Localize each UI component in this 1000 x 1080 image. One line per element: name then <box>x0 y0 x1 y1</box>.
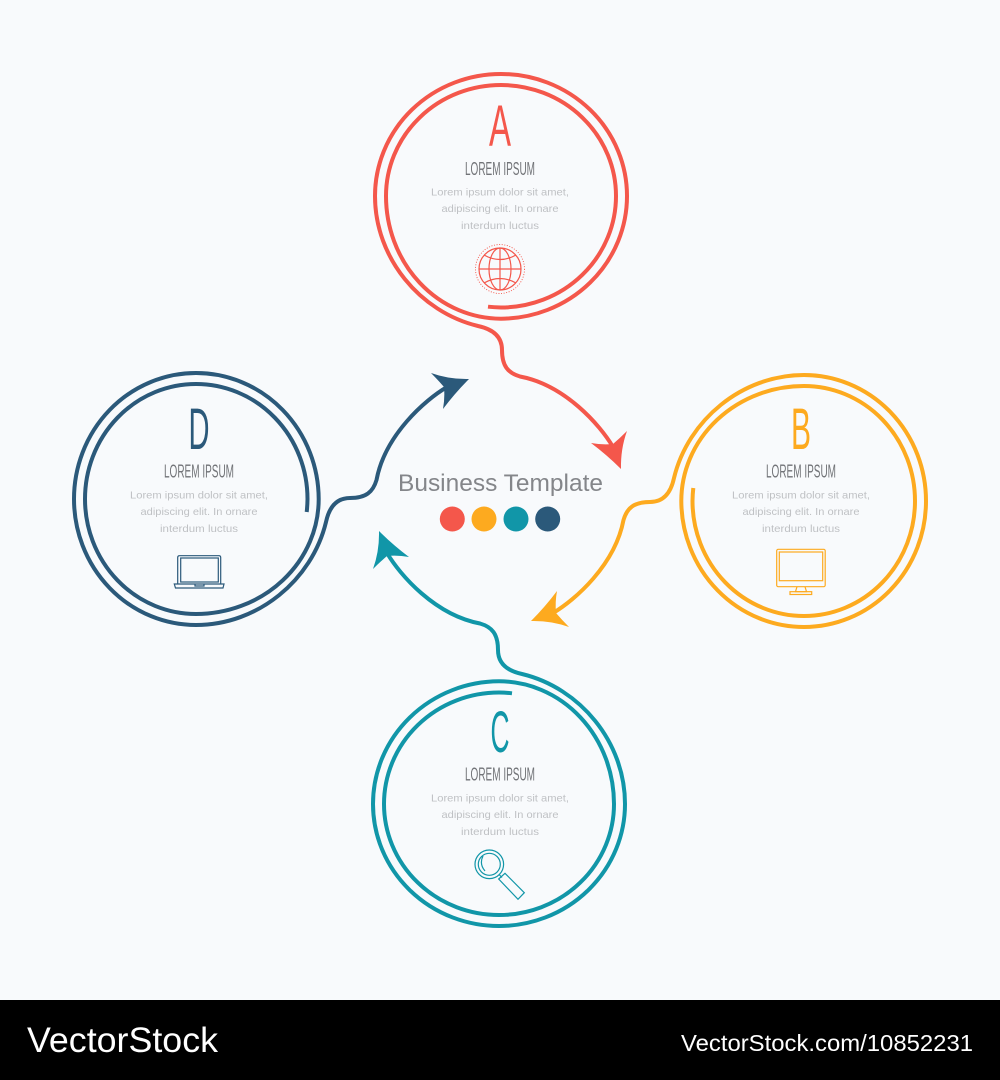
text block A: adipiscing elit. In ornare <box>442 203 559 215</box>
letter D: D <box>188 397 210 462</box>
heading A: LOREM IPSUM <box>465 159 535 179</box>
heading C: LOREM IPSUM <box>465 764 535 784</box>
text block A: interdum luctus <box>461 220 539 232</box>
spiral arrow D <box>74 373 469 625</box>
panel: C <box>373 531 625 926</box>
text block A: Lorem ipsum dolor sit amet, <box>431 186 569 198</box>
icon: monitor <box>777 549 825 594</box>
text block A <box>431 186 569 232</box>
icon: magnifier <box>475 850 524 899</box>
icon: laptop <box>174 556 224 588</box>
color dots <box>440 506 560 532</box>
center title: Business Template <box>398 470 603 497</box>
footer url: VectorStock.com/10852231 <box>681 1030 973 1056</box>
footer logo: VectorStock <box>27 1021 219 1060</box>
heading B: LOREM IPSUM <box>766 462 836 482</box>
panel: D <box>74 373 469 625</box>
icon: globe <box>476 244 524 294</box>
text block D: adipiscing elit. In ornare <box>140 506 258 518</box>
spiral arrow A <box>375 74 627 469</box>
text block C: adipiscing elit. In ornare <box>442 809 559 821</box>
text block D <box>130 490 268 535</box>
text block C: Lorem ipsum dolor sit amet, <box>431 792 569 804</box>
text block B: interdum luctus <box>762 523 840 535</box>
text block D: interdum luctus <box>160 523 238 535</box>
text block C <box>431 792 569 838</box>
text block C: interdum luctus <box>461 826 539 838</box>
spiral arrow B <box>531 375 926 627</box>
letter A: A <box>489 94 511 159</box>
panel: A <box>375 74 627 469</box>
text block B: adipiscing elit. In ornare <box>742 506 860 518</box>
spiral arrow C <box>373 531 625 926</box>
footer bar <box>0 1000 1000 1080</box>
letter B: B <box>791 397 811 462</box>
text block D: Lorem ipsum dolor sit amet, <box>130 490 268 502</box>
panel: C: C <box>490 700 510 765</box>
text block B <box>732 490 870 535</box>
heading D: LOREM IPSUM <box>164 462 234 482</box>
panel: B <box>531 375 926 627</box>
text block B: Lorem ipsum dolor sit amet, <box>732 490 870 502</box>
